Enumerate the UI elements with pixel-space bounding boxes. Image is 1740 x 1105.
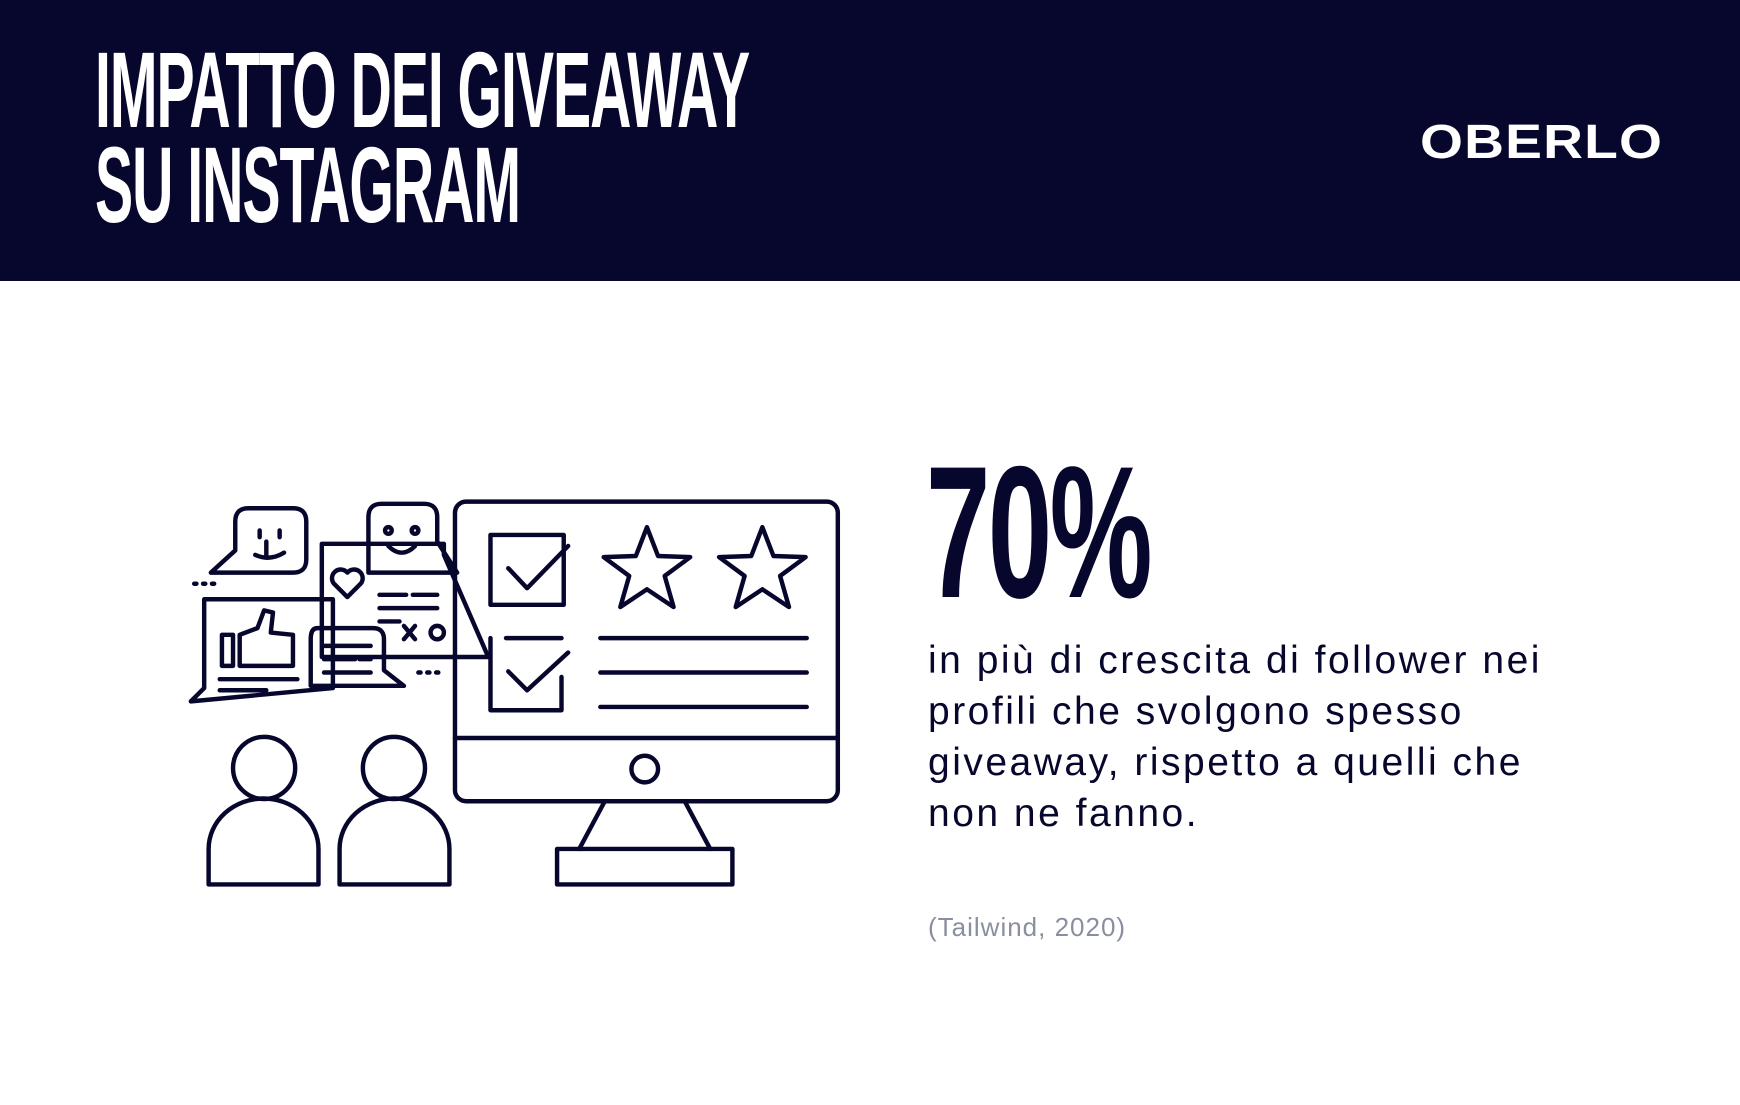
title: SU INSTAGRAM bbox=[95, 124, 520, 245]
chat bubbles bbox=[191, 504, 488, 701]
source: (Tailwind, 2020) bbox=[928, 912, 1126, 942]
header bar bbox=[0, 0, 1740, 281]
title bbox=[95, 29, 750, 245]
logo: OBERLO bbox=[1420, 116, 1663, 169]
title: IMPATTO DEI GIVEAWAY bbox=[95, 29, 749, 150]
description bbox=[928, 639, 1542, 835]
monitor bbox=[455, 502, 838, 884]
description: giveaway, rispetto a quelli che bbox=[928, 741, 1523, 784]
stat: 70%: 70% bbox=[926, 427, 1150, 637]
description: profili che svolgono spesso bbox=[928, 690, 1464, 733]
description: non ne fanno. bbox=[928, 792, 1199, 835]
people bbox=[209, 737, 449, 884]
description: in più di crescita di follower nei bbox=[928, 639, 1542, 682]
